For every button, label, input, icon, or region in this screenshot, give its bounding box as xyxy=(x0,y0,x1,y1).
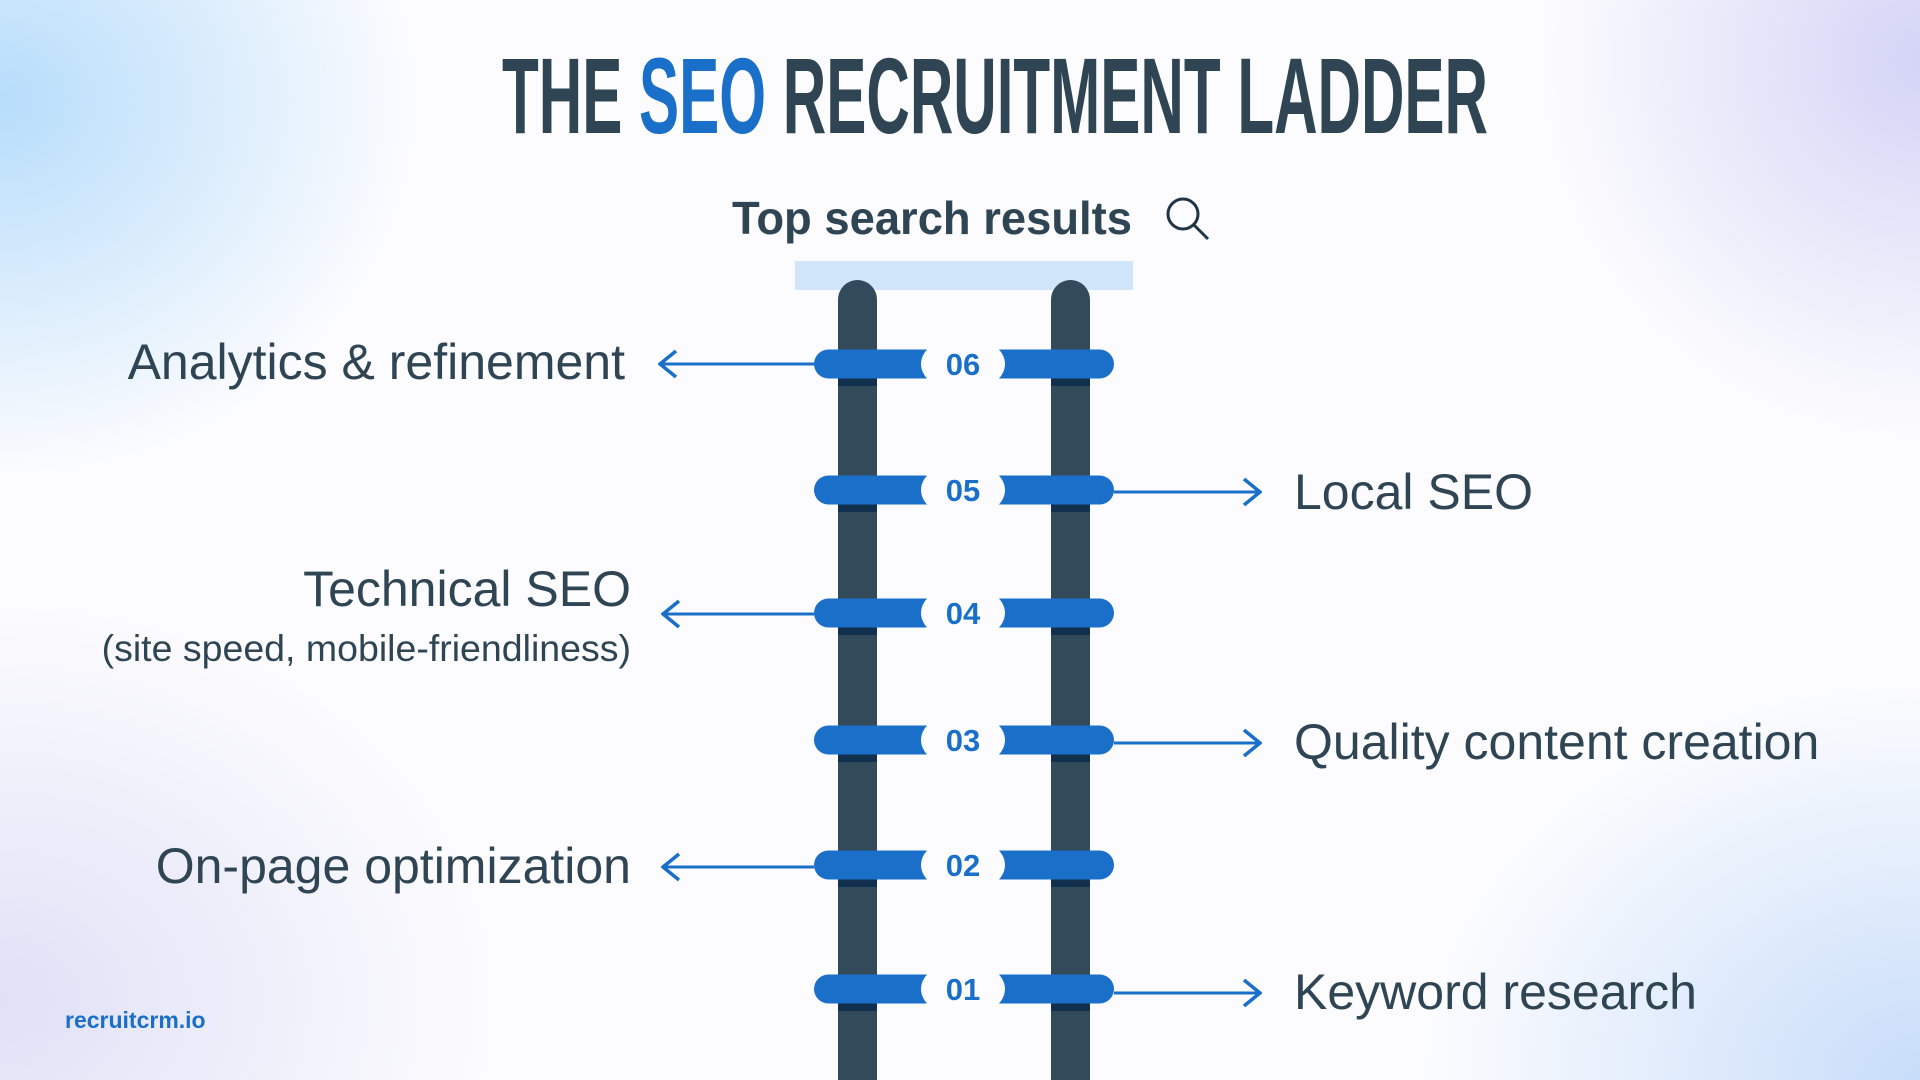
rung 03 xyxy=(814,726,1114,762)
rung 05: 05 xyxy=(946,473,980,508)
rung 02: 02 xyxy=(946,848,980,883)
rung 04 xyxy=(814,598,1114,635)
arrow 04 xyxy=(663,612,814,616)
subheading: top search results: Top search results xyxy=(732,192,1132,244)
arrow 01 xyxy=(1114,992,1260,994)
arrow 03 xyxy=(1114,742,1260,744)
brand: recruitcrm.io xyxy=(65,1007,206,1033)
rung 03: 03 xyxy=(946,723,980,758)
rung 05 xyxy=(814,476,1114,512)
ladder xyxy=(814,280,1114,1080)
label 01: Keyword research xyxy=(1294,964,1697,1020)
label 02: On-page optimization xyxy=(156,838,631,894)
rung 02 xyxy=(814,850,1114,887)
label 06: Analytics & refinement xyxy=(128,334,625,390)
label 04 xyxy=(102,561,631,669)
rung 01 xyxy=(814,974,1114,1011)
label 03: Quality content creation xyxy=(1294,714,1819,770)
label 05: Local SEO xyxy=(1294,464,1533,520)
icon: magnifier xyxy=(1168,199,1208,239)
arrow 05 xyxy=(1114,490,1260,494)
rung 06 xyxy=(814,350,1114,386)
top bar xyxy=(795,261,1133,290)
rung 06: 06 xyxy=(946,347,980,382)
label 04: (site speed, mobile-friendliness) xyxy=(102,627,631,669)
arrow 06 xyxy=(660,362,814,366)
rung 01: 01 xyxy=(946,972,980,1007)
label 04: Technical SEO xyxy=(303,561,631,617)
rung 04: 04 xyxy=(946,596,981,631)
arrow 02 xyxy=(663,866,814,868)
